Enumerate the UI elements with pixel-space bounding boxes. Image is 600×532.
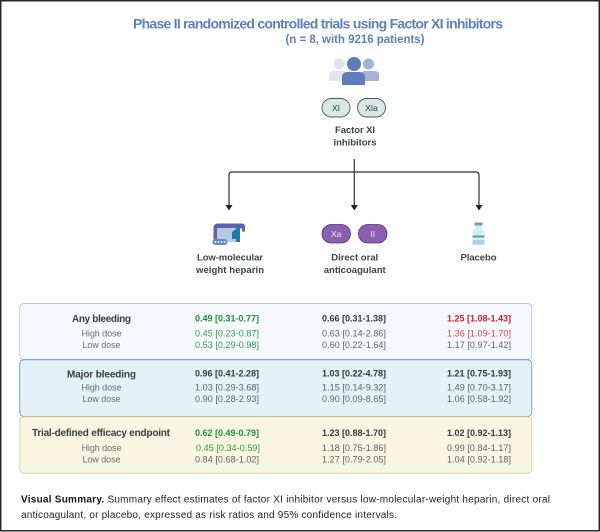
title: Phase II randomized controlled trials using Factor XI inhibitors bbox=[133, 16, 503, 32]
panel: trial-defined efficacy endpoint: 0.45 [0.34-0.59] bbox=[196, 443, 260, 453]
panel: any bleeding: Low dose bbox=[82, 340, 120, 350]
caption: visual summary: anticoagulant, or placebo, expressed as risk ratios and 95% confidence intervals. bbox=[21, 510, 397, 521]
panel: major bleeding: 0.96 [0.41-2.28] bbox=[195, 368, 259, 378]
panel: any bleeding: 0.53 [0.29-0.98] bbox=[195, 340, 259, 350]
panel: trial-defined efficacy endpoint: 0.62 [0.49-0.79] bbox=[195, 428, 259, 438]
pill: XI bbox=[322, 98, 350, 117]
panel: any bleeding: 0.60 [0.22-1.64] bbox=[322, 340, 386, 350]
panel: trial-defined efficacy endpoint bbox=[20, 417, 532, 473]
panel: major bleeding: High dose bbox=[82, 382, 122, 392]
panel: major bleeding: 0.90 [0.09-8.65] bbox=[322, 394, 386, 404]
pill: Xa: Xa bbox=[331, 229, 342, 239]
panel: trial-defined efficacy endpoint: High dose bbox=[82, 443, 122, 453]
panel: major bleeding: 0.90 [0.28-2.93] bbox=[195, 394, 259, 404]
panel: any bleeding: 1.36 [1.09-1.70] bbox=[447, 328, 511, 338]
pill: XI: XI bbox=[332, 103, 340, 113]
panel: trial-defined efficacy endpoint: 1.02 [0.92-1.13] bbox=[447, 428, 511, 438]
panel: any bleeding: 0.66 [0.31-1.38] bbox=[322, 314, 386, 324]
panel: major bleeding: 1.03 [0.29-3.68] bbox=[195, 382, 259, 392]
panel: trial-defined efficacy endpoint: 1.27 [0.79-2.05] bbox=[322, 454, 386, 464]
panel: trial-defined efficacy endpoint: 1.18 [0.75-1.86] bbox=[322, 443, 386, 453]
caption: visual summary bbox=[21, 494, 550, 521]
panel: major bleeding: Major bleeding bbox=[67, 370, 136, 380]
panel: any bleeding: 0.45 [0.23-0.87] bbox=[195, 328, 259, 338]
panel: any bleeding: 0.63 [0.14-2.86] bbox=[322, 328, 386, 338]
panel: trial-defined efficacy endpoint: 0.84 [0.68-1.02] bbox=[195, 454, 259, 464]
panel: trial-defined efficacy endpoint: Low dose bbox=[82, 454, 120, 464]
panel: trial-defined efficacy endpoint: 1.04 [0.92-1.18] bbox=[447, 454, 511, 464]
caption: visual summary: Visual Summary. Summary effect estimates of factor XI inhibitor versus low-molecular-weight heparin, direct oral bbox=[21, 494, 550, 506]
panel: any bleeding: 0.49 [0.31-0.77] bbox=[195, 314, 259, 324]
label: Factor XI inhibitors: Factor XI bbox=[335, 125, 375, 136]
icon: low-molecular-weight heparin syringe bbox=[212, 224, 244, 245]
panel: major bleeding: 1.06 [0.58-1.92] bbox=[447, 394, 511, 404]
panel: trial-defined efficacy endpoint: Trial-defined efficacy endpoint bbox=[32, 428, 171, 439]
panel: trial-defined efficacy endpoint: 0.99 [0.84-1.17] bbox=[447, 443, 511, 453]
panel: major bleeding: Low dose bbox=[82, 394, 120, 404]
subtitle: (n = 8, with 9216 patients) bbox=[286, 34, 425, 46]
label: placebo: Placebo bbox=[460, 252, 497, 264]
arrows: branching tree bbox=[226, 159, 482, 210]
panel: major bleeding: 1.49 [0.70-3.17] bbox=[447, 382, 511, 392]
icon: placebo vial bbox=[472, 222, 484, 245]
panel: major bleeding bbox=[20, 360, 532, 416]
label: direct oral anticoagulant bbox=[324, 252, 387, 276]
pill: XIa: XIa bbox=[365, 103, 378, 113]
panel: any bleeding: 1.17 [0.97-1.42] bbox=[447, 340, 511, 350]
panel: any bleeding: 1.25 [1.08-1.43] bbox=[447, 314, 511, 324]
icon: patients group bbox=[329, 57, 379, 85]
panel: major bleeding: 1.21 [0.75-1.93] bbox=[447, 368, 511, 378]
panel: any bleeding bbox=[20, 304, 532, 360]
panel: major bleeding: 1.03 [0.22-4.78] bbox=[322, 368, 386, 378]
label: low-molecular weight heparin: Low-molecular bbox=[197, 252, 263, 264]
panel: major bleeding: 1.15 [0.14-9.32] bbox=[322, 382, 386, 392]
label: low-molecular weight heparin bbox=[195, 252, 264, 276]
label: direct oral anticoagulant: Direct oral bbox=[331, 252, 378, 264]
label: Factor XI inhibitors bbox=[334, 125, 376, 148]
label: direct oral anticoagulant: anticoagulant bbox=[324, 265, 387, 276]
panel: trial-defined efficacy endpoint: 1.23 [0.88-1.70] bbox=[322, 428, 386, 438]
panel: any bleeding: High dose bbox=[82, 328, 122, 338]
panel: any bleeding: Any bleeding bbox=[72, 314, 131, 325]
pill: II: II bbox=[370, 229, 375, 239]
pill: XIa bbox=[358, 98, 386, 117]
label: low-molecular weight heparin: weight heparin bbox=[195, 265, 264, 276]
pill: II bbox=[358, 224, 387, 243]
label: Factor XI inhibitors: inhibitors bbox=[334, 138, 376, 148]
pill: Xa bbox=[322, 224, 350, 243]
